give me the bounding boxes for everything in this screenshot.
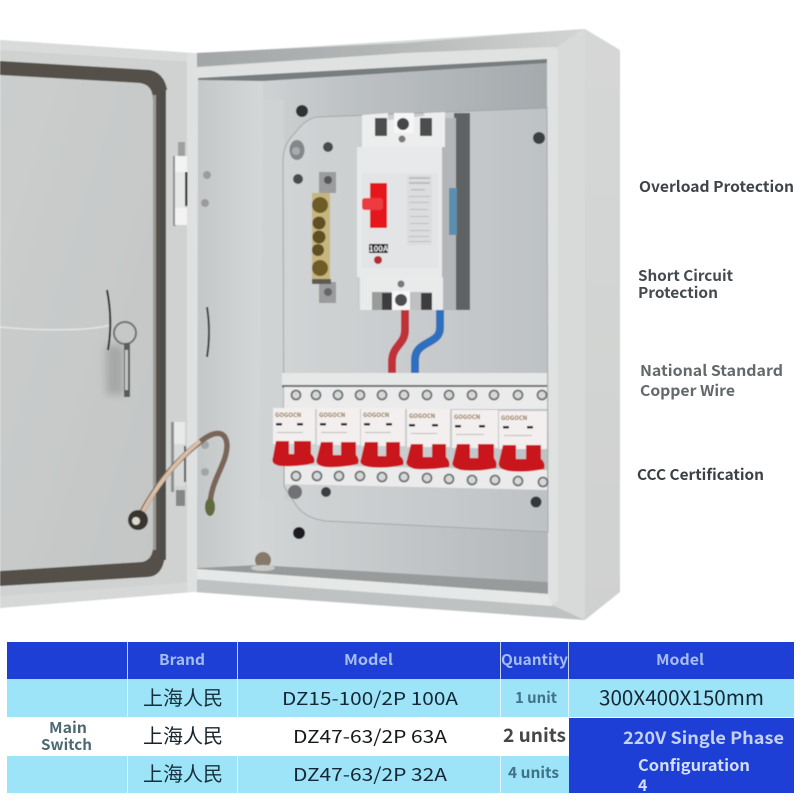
configuration cell	[569, 718, 794, 796]
door frame	[0, 40, 193, 608]
feature: National Standard Copper Wire	[640, 360, 783, 401]
row 1: DZ15-100/2P 100A	[282, 685, 458, 711]
inner lip	[189, 47, 558, 606]
lower lip	[195, 569, 552, 606]
cabinet top and bottom flange	[195, 29, 585, 620]
top shadow line of the opening	[198, 59, 547, 81]
bottom terminal	[360, 277, 443, 310]
cabinet front frame	[194, 29, 585, 620]
interior back wall	[258, 59, 548, 582]
cabinet right side face	[585, 29, 620, 620]
row 2: DZ47-63/2P 63A	[293, 723, 447, 749]
breaker module 3: GOGOCN	[363, 410, 389, 419]
main switch row label: Main	[49, 717, 87, 738]
upper hinge bolts	[201, 171, 211, 207]
row 1: 300X400X150mm	[599, 682, 764, 711]
photo: open electrical distribution box	[0, 29, 620, 620]
breaker module 5	[452, 410, 498, 471]
feature: Short Circuit Protection	[638, 265, 734, 303]
bus bar terminal	[312, 172, 336, 303]
lower hinge	[171, 422, 186, 506]
table header row: Model	[656, 649, 704, 670]
blue side tag	[449, 188, 457, 235]
configuration cell: 4	[638, 772, 647, 796]
interior floor	[197, 565, 548, 594]
breaker module 6: GOGOCN	[501, 413, 527, 422]
lower terminal strip	[285, 465, 548, 490]
red wire	[392, 310, 405, 373]
row 2: 上海人民	[143, 720, 223, 749]
left strip of back wall	[259, 100, 284, 500]
holes and bolts on plate	[251, 105, 545, 571]
din rail cover	[282, 373, 547, 388]
upper hinge	[173, 142, 188, 226]
feature: Short Circuit Protection: Protection	[638, 282, 718, 303]
specification table	[7, 642, 794, 796]
indicator light	[374, 256, 382, 264]
dark rubber gasket	[0, 61, 168, 586]
top terminal	[362, 112, 445, 147]
main breaker 100A	[357, 112, 470, 310]
breaker module 2: GOGOCN	[319, 410, 345, 419]
row 3	[7, 756, 569, 793]
breaker module 6	[499, 411, 547, 472]
feature: National Standard Copper Wire: Copper Wire	[640, 380, 735, 401]
main switch row label	[41, 717, 92, 755]
table header row: Quantity	[501, 649, 568, 670]
breaker module 5: GOGOCN	[454, 412, 480, 421]
feature: National Standard Copper Wire: National Standard	[640, 360, 783, 381]
breaker module 1	[272, 408, 315, 466]
feature: Short Circuit Protection: Short Circuit	[638, 265, 734, 286]
breaker module 4: GOGOCN	[409, 411, 435, 420]
table header row	[7, 642, 794, 679]
hinge strip	[166, 90, 187, 570]
breaker module 4	[406, 409, 450, 469]
row 3: 上海人民	[143, 758, 223, 787]
table header row: Brand	[159, 649, 205, 670]
row 2	[143, 720, 566, 749]
interior left wall	[197, 78, 263, 568]
rating label: 100A	[369, 244, 389, 255]
breaker module 1: GOGOCN	[275, 410, 301, 419]
door inner panel	[0, 75, 153, 571]
upper terminal strip	[284, 387, 547, 409]
breaker module 2	[316, 408, 360, 467]
row 2: 2 units	[503, 721, 566, 748]
door handle crease	[0, 325, 110, 330]
row 1	[7, 679, 794, 717]
main switch row label: Switch	[41, 734, 92, 755]
door top edge	[0, 40, 193, 62]
row 3: 4 units	[508, 762, 559, 783]
row 3: DZ47-63/2P 32A	[293, 761, 447, 787]
key on ring	[114, 322, 136, 397]
lower back wall	[258, 500, 548, 582]
table header row: Model	[344, 649, 393, 670]
red toggle	[362, 183, 387, 228]
configuration cell: 220V Single Phase	[623, 724, 784, 749]
spec plate	[407, 175, 432, 245]
grounding wire	[128, 433, 227, 530]
lock slot	[107, 290, 110, 350]
feature: CCC Certification: CCC Certification	[637, 464, 764, 485]
lower hinge bolts	[201, 441, 209, 476]
row 1: 1 unit	[515, 687, 558, 708]
open door	[0, 40, 197, 608]
wall slot	[207, 307, 209, 357]
mounting plate	[283, 108, 548, 532]
breaker front face	[357, 147, 442, 277]
door edge return	[187, 53, 197, 592]
row 1: 上海人民	[143, 682, 223, 711]
blue wire	[415, 310, 440, 373]
miniature breaker row	[272, 387, 548, 490]
door bottom edge	[0, 582, 193, 608]
feature: Overload Protection: Overload Protection	[639, 176, 794, 197]
configuration cell: Configuration	[638, 752, 750, 776]
breaker module 3	[360, 408, 405, 468]
key shadow on door	[106, 345, 124, 395]
